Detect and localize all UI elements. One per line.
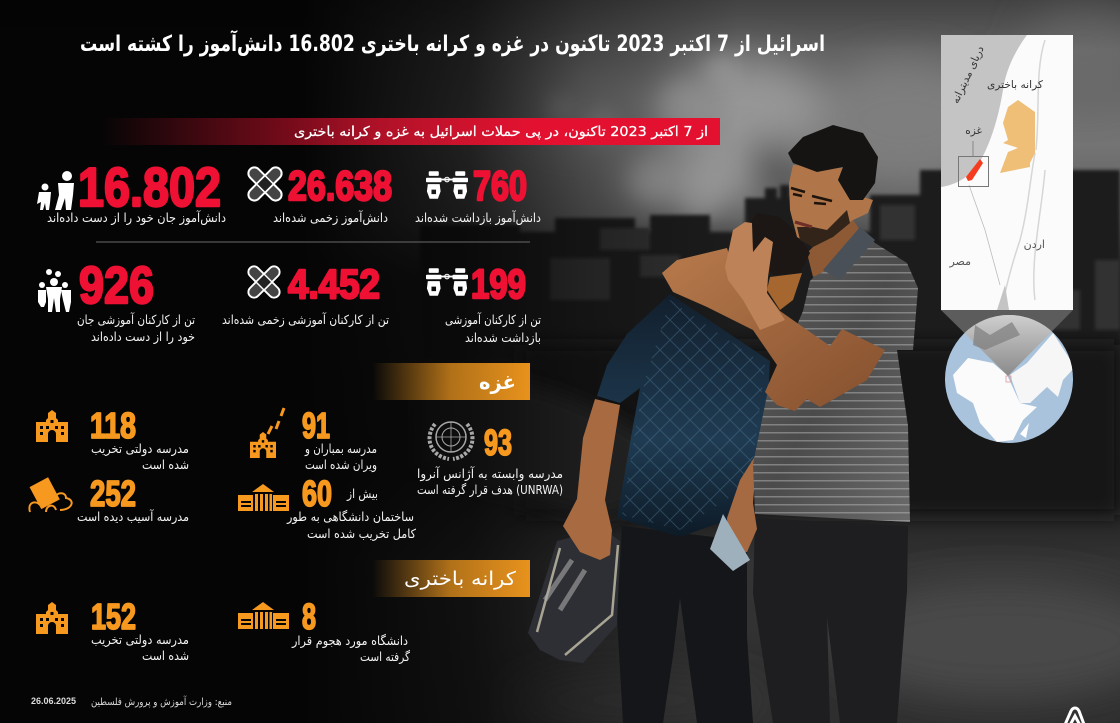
- boy's hair: [742, 213, 810, 275]
- stat: 118 schools: [36, 405, 189, 472]
- boy's shirt: [597, 294, 770, 537]
- man's hand on the boy's head: [725, 222, 785, 330]
- man's face: [789, 165, 873, 247]
- man's trousers: [753, 518, 908, 723]
- map panel: [941, 35, 1073, 310]
- West Bank banner: [372, 560, 530, 597]
- stat: staff detained: بازداشت شده‌اند: [465, 330, 541, 346]
- funnel: [941, 310, 1073, 376]
- stat: 152 schools: [36, 596, 189, 663]
- stat: students killed: 16.802: [78, 156, 221, 218]
- stat: 60 university buildings: 60: [302, 473, 332, 514]
- stat: 91 bombed schools: 91: [302, 405, 330, 446]
- icon: school: [36, 410, 68, 442]
- stat: 93 UNRWA schools: 93: [484, 422, 512, 463]
- man's shirt: [753, 227, 918, 522]
- stat: staff wounded: تن از کارکنان آموزشی زخمی شده‌اند: [222, 312, 389, 328]
- Gaza strip: [966, 159, 983, 181]
- boy's arm and hand: [563, 399, 620, 560]
- stat: 252 damaged schools: [29, 473, 189, 525]
- Gaza box: [958, 156, 988, 186]
- sea: [941, 35, 1027, 187]
- stat: 93 UNRWA schools: مدرسه وابسته به آژانس آنروا: [417, 466, 563, 482]
- stat: 60 university buildings: کامل تخریب شده است: [307, 526, 416, 542]
- stat: staff detained: [426, 261, 541, 346]
- stat: students wounded: دانش‌آموز زخمی شده‌اند: [273, 210, 388, 226]
- icon: school: [36, 602, 68, 634]
- stat: 118 schools: مدرسه دولتی تخریب: [91, 441, 189, 457]
- stat: 8 universities: 8: [302, 596, 316, 637]
- stat: students detained: [415, 162, 541, 226]
- stat: students wounded: [246, 162, 392, 226]
- Africa: [953, 358, 1037, 442]
- stat: staff wounded: 4.452: [288, 261, 380, 307]
- man's beard: [797, 210, 850, 247]
- stat: 91 bombed schools: [250, 405, 377, 473]
- map panel: دریای مدیترانه: [950, 44, 987, 105]
- map panel: اردن: [1024, 238, 1045, 251]
- stat: staff wounded: [222, 261, 389, 328]
- stat: 118 schools: 118: [90, 405, 136, 446]
- Gaza banner: [372, 363, 530, 400]
- red banner: [100, 118, 720, 145]
- stat: staff killed: 926: [79, 257, 154, 315]
- man's hair: [788, 125, 878, 200]
- stat: 93 UNRWA schools: [417, 422, 563, 498]
- funnel over globe: [964, 315, 1052, 376]
- stat: students killed: دانش‌آموز جان خود را از دست داده‌اند: [47, 210, 226, 226]
- West Bank banner: کرانه باختری: [404, 568, 517, 590]
- stat: students detained: دانش‌آموز بازداشت شده‌اند: [415, 210, 541, 226]
- stat: 252 damaged schools: مدرسه آسیب دیده است: [77, 509, 189, 525]
- stat: 91 bombed schools: مدرسه بمباران و: [304, 441, 377, 457]
- photo: two boys embracing: [528, 125, 918, 723]
- stat: 152 schools: 152: [91, 596, 136, 637]
- date: 26.06.2025: [31, 696, 76, 706]
- icon: students: [37, 171, 74, 210]
- stat: students wounded: 26.638: [288, 162, 392, 209]
- icon: university: [238, 602, 289, 629]
- map panel: مصر: [948, 255, 971, 268]
- icon: collapsed building: [29, 477, 72, 512]
- stat: 93 UNRWA schools: (UNRWA) هدف قرار گرفته است: [417, 482, 563, 498]
- logo: AA: [1064, 708, 1085, 723]
- stat: students detained: 760: [473, 162, 527, 209]
- stat: 152 schools: مدرسه دولتی تخریب: [91, 632, 189, 648]
- stat: staff killed: تن از کارکنان آموزشی جان: [77, 312, 195, 328]
- man's collar: [823, 227, 875, 280]
- map panel: غزه: [965, 125, 982, 137]
- stat: staff detained: تن از کارکنان آموزشی: [445, 312, 541, 328]
- man's mouth: [795, 222, 812, 227]
- stat: students killed: [37, 156, 226, 226]
- stat: 60 university buildings: بیش از: [346, 486, 378, 502]
- Gaza banner: غزه: [479, 370, 516, 394]
- terrain lines: [1002, 40, 1045, 310]
- stat: 152 schools: شده است: [142, 648, 189, 663]
- boy's face: [767, 273, 802, 310]
- title: اسرائیل از 7 اکتبر 2023 تاکنون در غزه و کرانه باختری 16.802 دانش‌آموز را کشته است: [80, 29, 825, 57]
- stat: 252 damaged schools: 252: [90, 473, 136, 514]
- icon: bandage: [246, 165, 284, 203]
- icon: bandage: [246, 264, 282, 300]
- man's arm: [662, 248, 885, 411]
- man's neck: [807, 220, 860, 277]
- icon: group of people: [38, 269, 71, 312]
- icon: bombed school: [250, 408, 284, 458]
- icon: handcuffed fists: [426, 171, 468, 199]
- shoes held in hand: [528, 529, 620, 663]
- stat: staff detained: 199: [471, 261, 526, 307]
- stat: staff killed: خود را از دست داده‌اند: [91, 329, 195, 345]
- red banner: از 7 اکتبر 2023 تاکنون، در پی حملات اسرائیل به غزه و کرانه باختری: [294, 124, 708, 140]
- stat: 118 schools: شده است: [142, 457, 189, 472]
- map labels: کرانه باختری: [987, 79, 1043, 91]
- icon: handcuffed fists: [426, 268, 468, 296]
- stat: staff killed: [38, 257, 195, 345]
- stat: 91 bombed schools: ویران شده است: [305, 457, 377, 473]
- boy's other hand: [727, 453, 757, 556]
- stat: 8 universities: دانشگاه مورد هجوم قرار: [291, 633, 408, 649]
- icon: university: [238, 484, 289, 511]
- boy's trousers: [617, 526, 753, 723]
- source: منبع: وزارت آموزش و پرورش فلسطین: [91, 695, 232, 708]
- stat: 60 university buildings: [238, 473, 416, 542]
- water bottle: [710, 514, 750, 571]
- globe with locator funnel: [941, 310, 1075, 443]
- West Bank: [1000, 100, 1035, 173]
- Asia: [1010, 333, 1075, 403]
- man's eyes and brows: [791, 188, 832, 204]
- stat: 8 universities: [238, 596, 410, 665]
- stat: 60 university buildings: ساختمان دانشگاهی به طور: [286, 509, 414, 525]
- stat: 8 universities: گرفته است: [360, 649, 410, 665]
- icon: UN emblem: [430, 422, 472, 459]
